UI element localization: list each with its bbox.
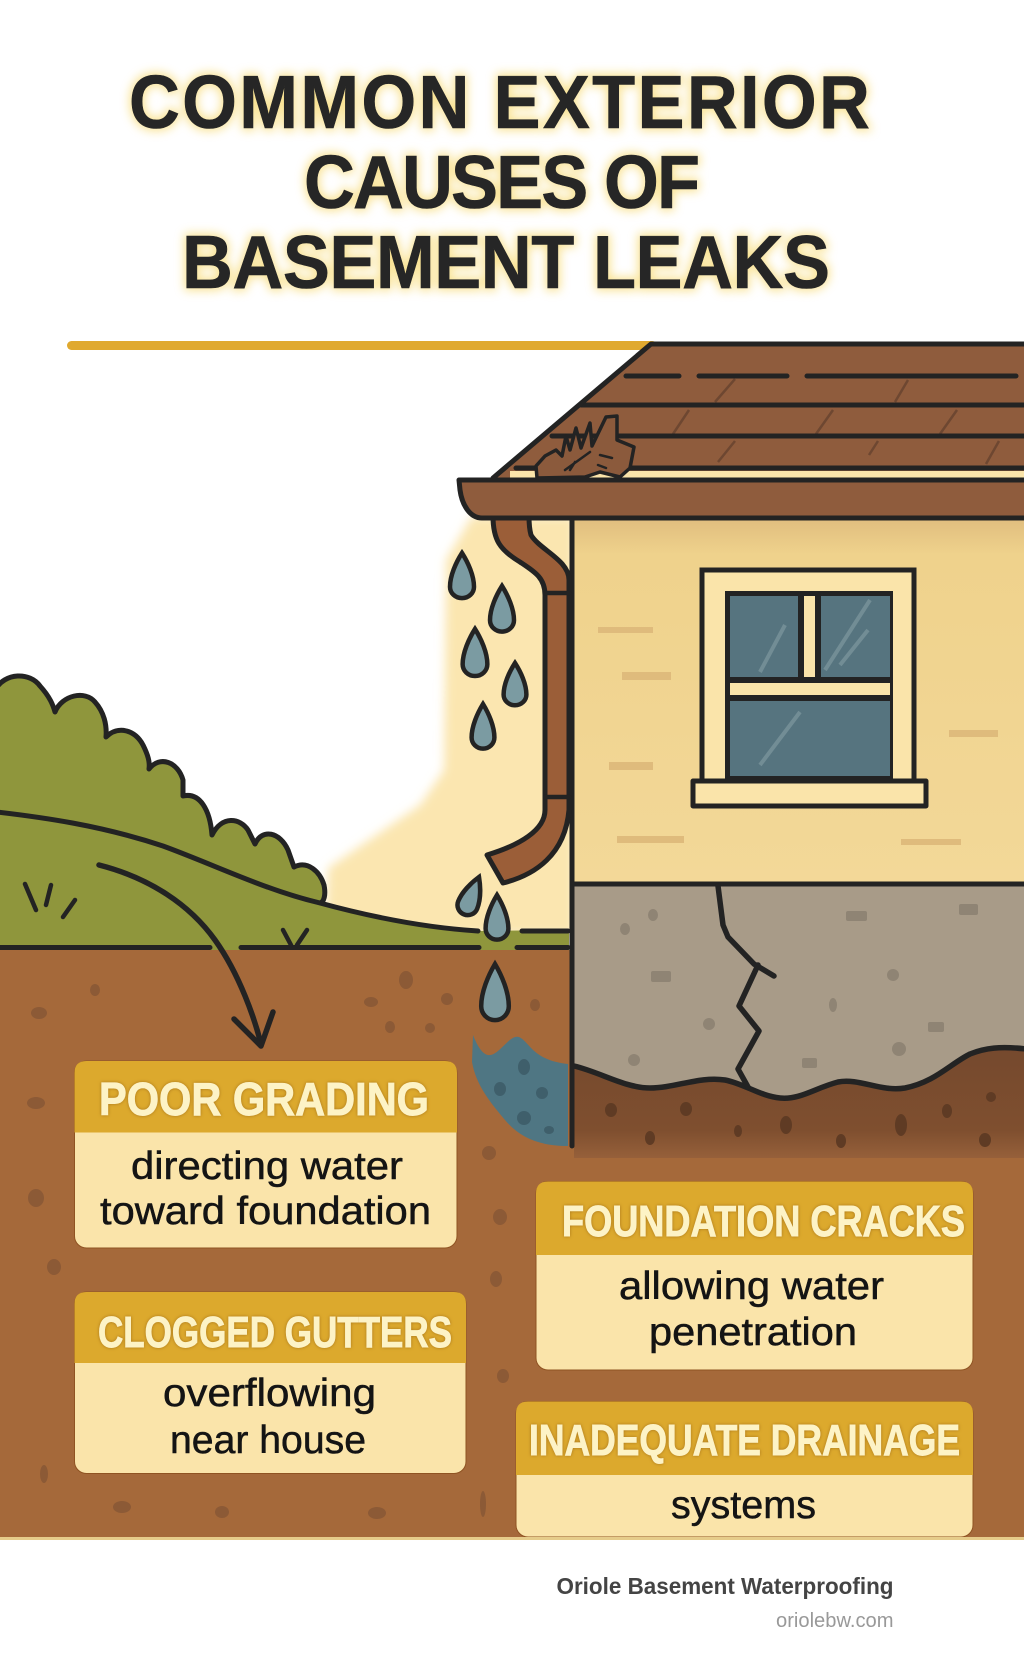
card text: toward foundation	[100, 1190, 431, 1233]
hill grade line	[0, 812, 478, 931]
roof outline	[493, 344, 1024, 478]
card text: overflowing	[163, 1372, 376, 1415]
dark soil under foundation	[574, 1048, 1024, 1158]
grading arrow	[99, 865, 273, 1046]
brick marks	[598, 627, 998, 845]
foundation wall	[574, 884, 1024, 1098]
foundation crack	[718, 886, 774, 1087]
card heading: CLOGGED GUTTERS	[98, 1308, 452, 1357]
footer url: oriolebw.com	[776, 1610, 894, 1632]
card text	[619, 1265, 884, 1354]
title: CAUSES OF	[304, 141, 700, 224]
title: CAUSES OF	[304, 141, 700, 224]
soil specks	[27, 971, 540, 1519]
water pool	[472, 1035, 568, 1146]
cream strip under shingles	[510, 471, 1024, 479]
pane reflections	[760, 600, 870, 765]
gutter	[459, 480, 1024, 518]
shingle course lines	[516, 376, 1024, 468]
cream glow behind the downspout	[325, 516, 575, 935]
footer brand: Oriole Basement Waterproofing	[556, 1573, 894, 1599]
lower pane	[730, 701, 890, 776]
middle rail	[730, 683, 890, 695]
title: COMMON EXTERIOR	[129, 61, 870, 144]
centre mullion	[804, 596, 815, 677]
title: COMMON EXTERIOR	[129, 61, 870, 144]
grass slope	[0, 812, 569, 950]
card text: penetration	[649, 1311, 857, 1354]
card text: near house	[170, 1419, 366, 1462]
upper left pane	[730, 596, 798, 677]
water drops	[450, 553, 526, 1020]
window	[693, 570, 926, 806]
ground line	[0, 945, 568, 950]
grass tufts	[25, 884, 307, 945]
card: poor grading	[74, 1061, 457, 1248]
house wall	[571, 518, 1024, 884]
title	[129, 61, 870, 304]
accent divider bar	[67, 341, 657, 350]
pool specks	[494, 1059, 554, 1134]
card text	[100, 1145, 431, 1233]
short ground line near wall	[522, 928, 568, 934]
card: clogged gutters	[74, 1292, 466, 1474]
clogged leaf debris	[536, 416, 634, 478]
bush	[0, 676, 325, 903]
foundation footing line	[574, 1048, 1024, 1098]
card text	[163, 1372, 376, 1462]
downspout	[487, 516, 569, 883]
roof	[493, 344, 1024, 479]
upper right pane	[821, 596, 890, 677]
card: foundation cracks	[536, 1182, 973, 1370]
card text: directing water	[131, 1145, 403, 1188]
house corner line	[570, 516, 574, 1146]
wall divider line	[572, 882, 1024, 886]
card text: allowing water	[619, 1265, 884, 1308]
shingle seams	[673, 379, 999, 464]
dark soil specks	[605, 1092, 996, 1148]
window sill	[693, 781, 926, 806]
card heading: POOR GRADING	[99, 1073, 429, 1125]
title: BASEMENT LEAKS	[182, 221, 830, 304]
card: inadequate drainage	[516, 1402, 973, 1537]
soil	[0, 950, 1024, 1537]
concrete specks	[620, 904, 978, 1068]
title: BASEMENT LEAKS	[182, 221, 830, 304]
card text: systems	[671, 1484, 816, 1527]
soil base edge	[0, 1537, 1024, 1540]
